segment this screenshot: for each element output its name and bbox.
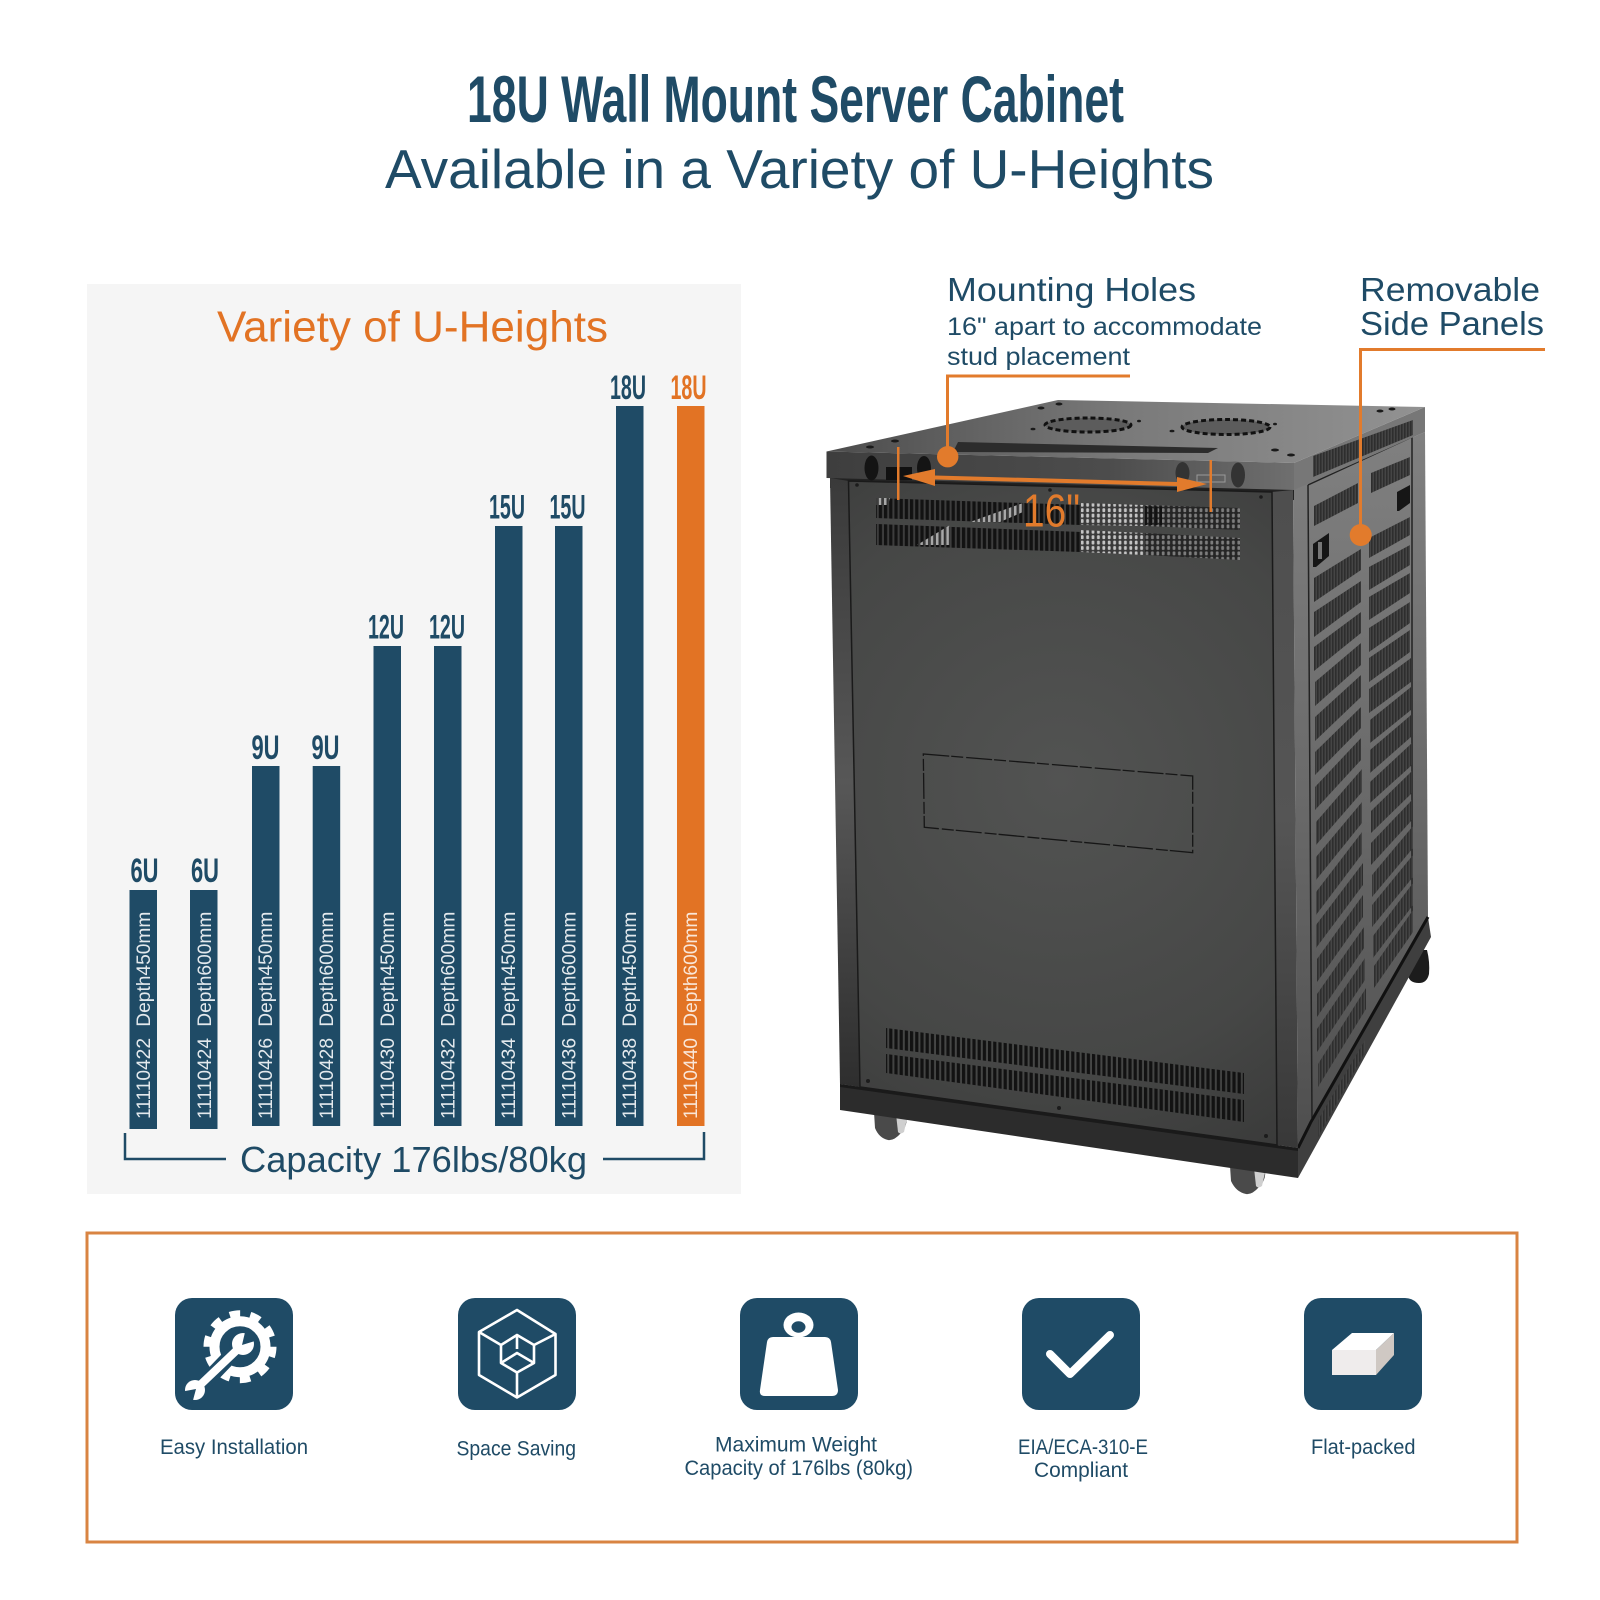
bar: 18U 11110440 highlighted: 18U (670, 369, 706, 407)
bar: 12U 11110432 (429, 608, 465, 1126)
upper vent slots (876, 498, 1240, 560)
leader line with dot (937, 376, 1130, 467)
bar: 12U 11110430: 11110430 (378, 1038, 399, 1119)
bar: 6U 11110424: 11110424 (195, 1038, 216, 1119)
feature: maximum weight (684, 1298, 913, 1480)
bar: 9U 11110428: 11110428 (317, 1038, 338, 1119)
callout heading: Side Panels (1360, 305, 1544, 342)
bar: 12U 11110432: Depth600mm (438, 912, 460, 1027)
door screws (855, 483, 1268, 1138)
bar: 18U 11110440 highlighted: Depth600mm (681, 912, 702, 1027)
bar: 15U 11110434: 15U (489, 488, 525, 526)
label (684, 1434, 913, 1480)
icon: weight (740, 1298, 858, 1410)
bar: 15U 11110436: 15U (550, 488, 586, 526)
dimension arrow (897, 447, 1212, 512)
callout: mounting holes (897, 271, 1262, 536)
leader line with dot (1350, 350, 1545, 546)
panel: features (87, 1233, 1517, 1542)
base front lip (840, 1084, 1298, 1151)
lip holes (864, 456, 1245, 488)
label: Maximum Weight (715, 1434, 877, 1456)
features border (87, 1233, 1517, 1542)
bar chart (130, 369, 706, 1129)
front door (848, 481, 1277, 1145)
label: EIA/ECA-310-E (1018, 1436, 1148, 1459)
back caster (1408, 950, 1429, 983)
callout description (947, 313, 1262, 371)
side panel (1293, 432, 1428, 1148)
side panel handles (1313, 485, 1410, 567)
bar: 12U 11110430: Depth450mm (378, 912, 399, 1027)
callout: removable side panels (1350, 271, 1545, 546)
label: Space Saving (456, 1438, 576, 1460)
right post (1272, 490, 1298, 1148)
bar: 18U 11110438 (610, 369, 646, 1126)
bar: 15U 11110436: Depth600mm (560, 912, 580, 1027)
bar: 12U 11110432: 12U (429, 608, 465, 646)
side vent slots (1314, 457, 1413, 1087)
bar: 9U 11110428: Depth600mm (317, 912, 338, 1027)
callout heading: Removable (1360, 271, 1540, 308)
top face (826, 400, 1425, 463)
top screws (866, 402, 1396, 456)
label: Flat-packed (1311, 1436, 1416, 1459)
bar: 15U 11110434: Depth450mm (499, 912, 520, 1027)
bar: 15U 11110434: 11110434 (499, 1038, 520, 1119)
front left caster (874, 1112, 908, 1140)
bar: 9U 11110426: 9U (252, 729, 280, 767)
callout description: stud placement (947, 343, 1130, 371)
panel: variety of U-heights (87, 284, 741, 1194)
icon: gear and wrench (175, 1298, 293, 1410)
icon: check mark (1022, 1298, 1140, 1410)
callout heading: Mounting Holes (947, 271, 1196, 308)
top side slats (1313, 420, 1413, 477)
feature: EIA/ECA compliant (1018, 1298, 1148, 1482)
side panel outline (1308, 437, 1412, 1118)
title: 18U Wall Mount Server Cabinet (467, 62, 1124, 136)
panel heading: Variety of U-Heights (217, 302, 608, 352)
base (840, 917, 1431, 1178)
bar: 15U 11110436: 11110436 (560, 1038, 580, 1119)
bar: 6U 11110424: 6U (191, 852, 219, 890)
bar: 18U 11110438: 11110438 (620, 1038, 641, 1119)
bar: 12U 11110430 (368, 608, 404, 1126)
bar: 6U 11110422: 11110422 (134, 1038, 155, 1119)
bar: 6U 11110422: 6U (130, 852, 158, 890)
bar: 9U 11110426: Depth450mm (256, 912, 277, 1027)
panel background (87, 284, 741, 1194)
bar: 15U 11110434 (489, 488, 525, 1126)
icon: box (1304, 1298, 1422, 1410)
top fans (1045, 418, 1270, 434)
door cover plate (923, 754, 1193, 853)
capacity bracket (125, 1132, 704, 1159)
bar: 6U 11110422 (130, 852, 158, 1129)
icon: cube (458, 1298, 576, 1410)
lower vent slots (886, 1028, 1244, 1122)
top right lip (1294, 407, 1425, 490)
feature: space saving (456, 1298, 576, 1460)
product photo: server cabinet (826, 400, 1431, 1194)
bar: 9U 11110428: 9U (312, 729, 340, 767)
bar: 9U 11110428 (312, 729, 340, 1126)
bar: 12U 11110432: 11110432 (438, 1038, 460, 1119)
callout description: 16" apart to accommodate (947, 313, 1262, 341)
front right caster (1230, 1166, 1266, 1194)
label: Capacity of 176lbs (80kg) (684, 1457, 913, 1480)
subtitle: Available in a Variety of U-Heights (385, 138, 1214, 200)
bar: 6U 11110424: Depth600mm (195, 912, 216, 1027)
bar: 15U 11110436 (550, 488, 586, 1126)
bar: 18U 11110438: Depth450mm (620, 912, 641, 1027)
top cable slot (953, 442, 1218, 453)
bar: 18U 11110440 highlighted (670, 369, 706, 1126)
label: Easy Installation (160, 1436, 308, 1459)
dark backing under top lip (830, 474, 1294, 500)
bar: 18U 11110438: 18U (610, 369, 646, 407)
capacity label: Capacity 176lbs/80kg (240, 1139, 587, 1180)
dimension label: 16" (1023, 484, 1080, 536)
bar: 9U 11110426: 11110426 (256, 1038, 277, 1119)
front top lip (826, 452, 1294, 490)
feature: flat-packed (1304, 1298, 1422, 1459)
bar: 12U 11110430: 12U (368, 608, 404, 646)
label: Compliant (1034, 1459, 1128, 1482)
bar: 9U 11110426 (252, 729, 280, 1126)
bar: 18U 11110440 highlighted: 11110440 (681, 1038, 702, 1119)
callout heading (1360, 271, 1544, 342)
label (1018, 1436, 1148, 1482)
bar: 6U 11110422: Depth450mm (134, 912, 155, 1027)
left post (830, 478, 860, 1087)
bar: 6U 11110424 (190, 852, 219, 1129)
feature: easy installation (160, 1298, 308, 1459)
